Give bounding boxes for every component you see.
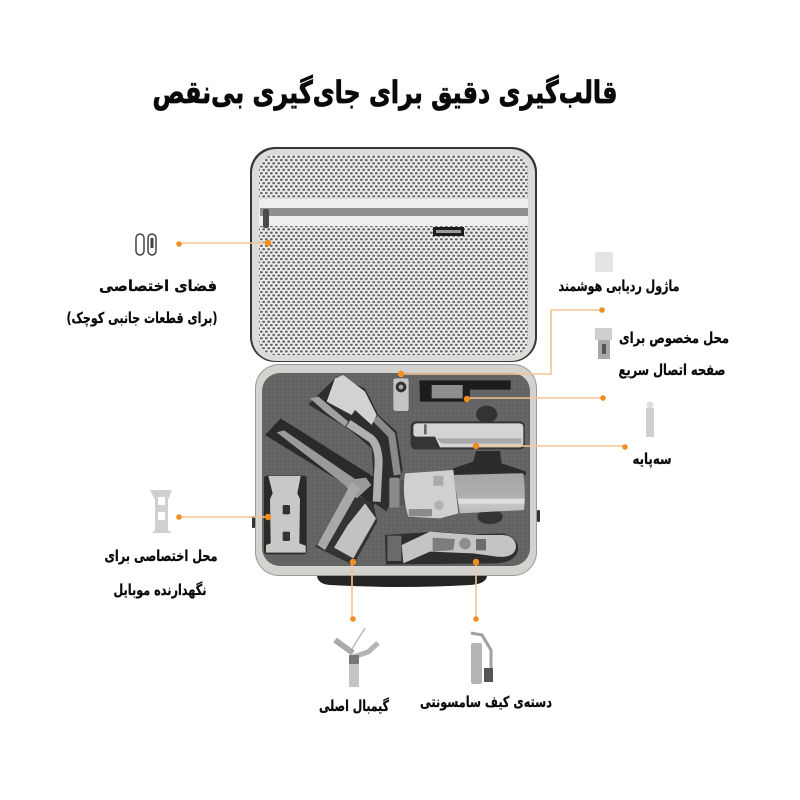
label: quick connection plate: صفحه اتصال سریع	[618, 361, 726, 379]
icon: side accessories	[136, 234, 156, 255]
zipper pull	[263, 209, 269, 228]
lid mesh lining	[259, 155, 528, 355]
icon: quick release plate	[595, 328, 612, 359]
brand tag	[433, 227, 464, 236]
suitcase handle accessory	[387, 532, 516, 563]
label: case handle: دسته‌ی کیف سامسونتی	[420, 693, 552, 711]
quick release plate	[432, 385, 463, 398]
cutouts	[265, 418, 382, 507]
tripod	[413, 423, 523, 447]
icon: phone holder	[150, 490, 172, 533]
title: قالب‌گیری دقیق برای جای‌گیری بی‌نقص	[152, 74, 618, 111]
label: special place for: محل مخصوص برای	[619, 329, 729, 347]
base shell	[255, 364, 537, 576]
label: for small accessories: (برای قطعات جانبی کوچک)	[66, 309, 218, 328]
foam	[262, 373, 530, 566]
label: dedicated space: فضای اختصاصی	[99, 277, 217, 295]
phone holder	[266, 476, 306, 553]
label: phone holder: نگهدارنده موبایل	[114, 581, 206, 599]
pocket zipper	[260, 208, 528, 216]
smart tracking module	[393, 378, 409, 411]
foam contents	[264, 375, 526, 565]
icon: case handle	[471, 633, 493, 684]
gimbal arm and heads	[277, 375, 525, 558]
icon: tracking module	[595, 252, 613, 272]
case base with foam tray	[252, 364, 540, 587]
label: main gimbal: گیمبال اصلی	[319, 697, 389, 715]
label: smart tracking module: ماژول ردیابی هوشمند	[558, 277, 680, 295]
foam side clips	[252, 516, 255, 528]
icon: main gimbal	[335, 628, 378, 687]
case lid	[250, 147, 537, 362]
connector lines	[180, 243, 625, 619]
label: dedicated place for: محل اختصاصی برای	[104, 547, 218, 565]
label: tripod: سه‌پایه	[632, 450, 672, 469]
carry handle	[317, 570, 487, 587]
icon: tripod	[646, 402, 654, 437]
marker dots	[176, 240, 628, 622]
pocket band	[259, 199, 528, 226]
